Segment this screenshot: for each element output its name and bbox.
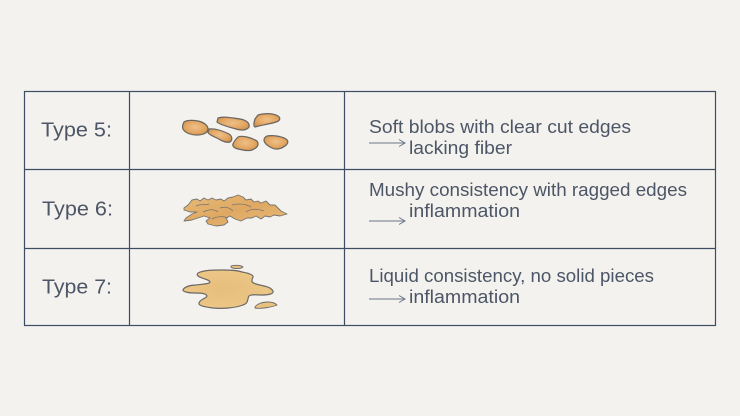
illustration: soft blobs	[183, 114, 288, 151]
description: Type 5: lacking fiber	[409, 138, 512, 158]
description: Type 6	[369, 180, 687, 221]
arrow: Type 7	[369, 296, 405, 302]
description: Type 7: inflammation	[409, 287, 520, 307]
description: Type 7: Liquid consistency, no solid pieces	[369, 266, 654, 286]
illustration: liquid puddle	[183, 265, 277, 308]
arrow: Type 5	[369, 140, 405, 146]
illustration: mushy pieces	[184, 195, 287, 226]
row label: Type 5: Type 5:	[41, 118, 112, 142]
description: Type 6: Mushy consistency with ragged edges	[369, 180, 687, 200]
row label: Type 7: Type 7:	[42, 276, 112, 298]
description: Type 6: inflammation	[409, 201, 520, 221]
description: Type 7	[369, 266, 654, 307]
description: Type 5: Soft blobs with clear cut edges	[369, 117, 631, 137]
description: Type 5	[369, 117, 631, 158]
table	[24, 92, 716, 326]
arrow: Type 6	[369, 218, 405, 224]
row label: Type 6: Type 6:	[42, 198, 113, 220]
